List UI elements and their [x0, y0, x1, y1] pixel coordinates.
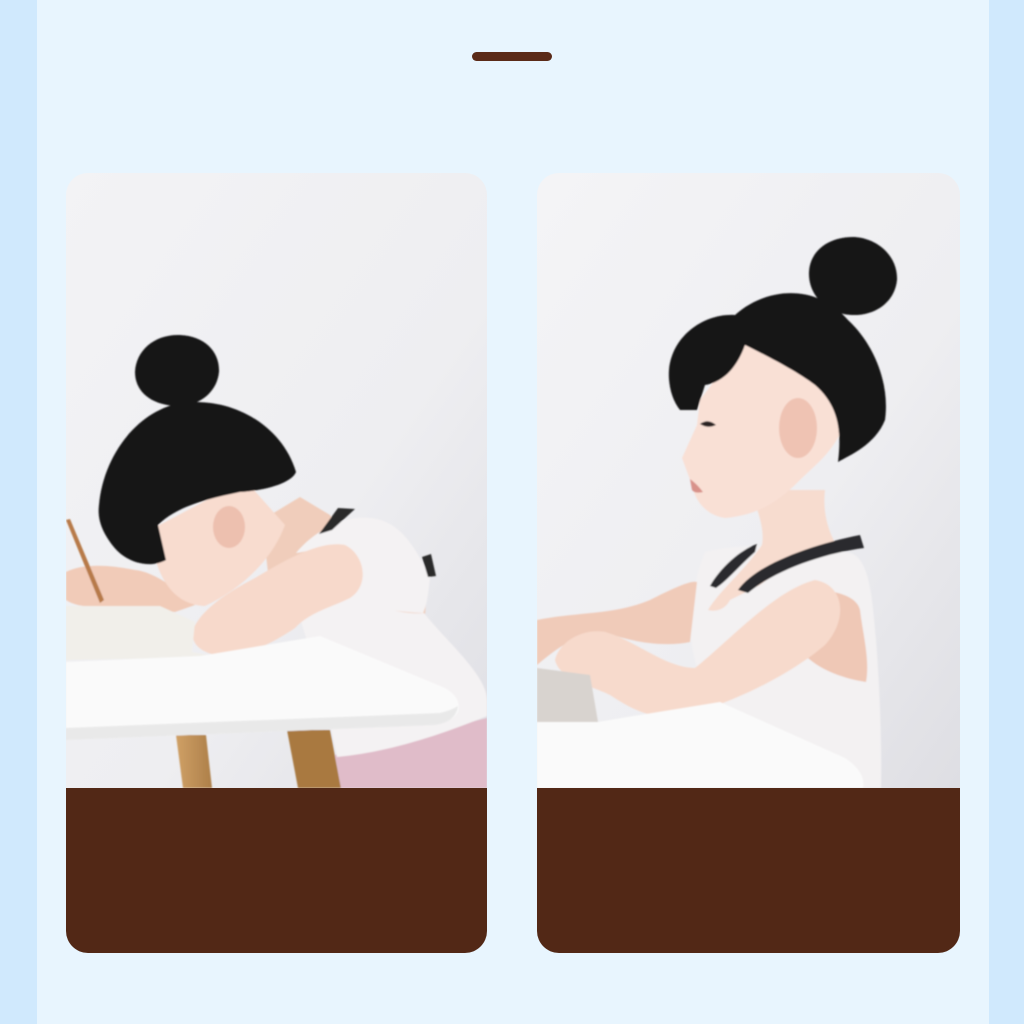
- right photo subject: [537, 237, 897, 788]
- far arm: [537, 582, 697, 665]
- near arm: [555, 580, 840, 717]
- panel: right, upright posture: [537, 173, 960, 953]
- hair: [669, 293, 886, 462]
- heading placeholder bar: [472, 52, 552, 61]
- table edge shadow: [66, 706, 458, 740]
- back skin: [808, 592, 868, 682]
- neck and chest skin: [708, 490, 838, 611]
- brown caption block: [537, 788, 960, 953]
- dress: [296, 518, 487, 757]
- table top: [66, 636, 459, 740]
- upper arm: [193, 544, 363, 656]
- table top: [537, 702, 863, 788]
- notebook: [67, 606, 194, 659]
- notebook: [537, 668, 598, 722]
- skirt: [335, 718, 487, 788]
- table legs: [176, 730, 341, 788]
- panel: left, slouching posture: [66, 173, 487, 953]
- left side strip: [0, 0, 37, 1024]
- eye: [700, 421, 716, 427]
- ear: [213, 506, 245, 548]
- face and head skin: [682, 340, 842, 518]
- face: [156, 489, 285, 606]
- posture strap: [710, 535, 864, 593]
- posture strap: [319, 508, 436, 577]
- hair bun: [135, 335, 219, 406]
- ear: [779, 398, 817, 458]
- hair: [99, 402, 296, 564]
- neck and back skin: [262, 497, 428, 615]
- photo background: [66, 173, 487, 788]
- right side strip: [989, 0, 1024, 1024]
- dress: [690, 546, 881, 788]
- left photo subject: [66, 335, 487, 788]
- photo background: [537, 173, 960, 788]
- hand and forearm: [66, 566, 195, 612]
- pencil: [66, 519, 104, 603]
- brown caption block: [66, 788, 487, 953]
- lips: [690, 479, 703, 493]
- hair bun: [809, 237, 897, 315]
